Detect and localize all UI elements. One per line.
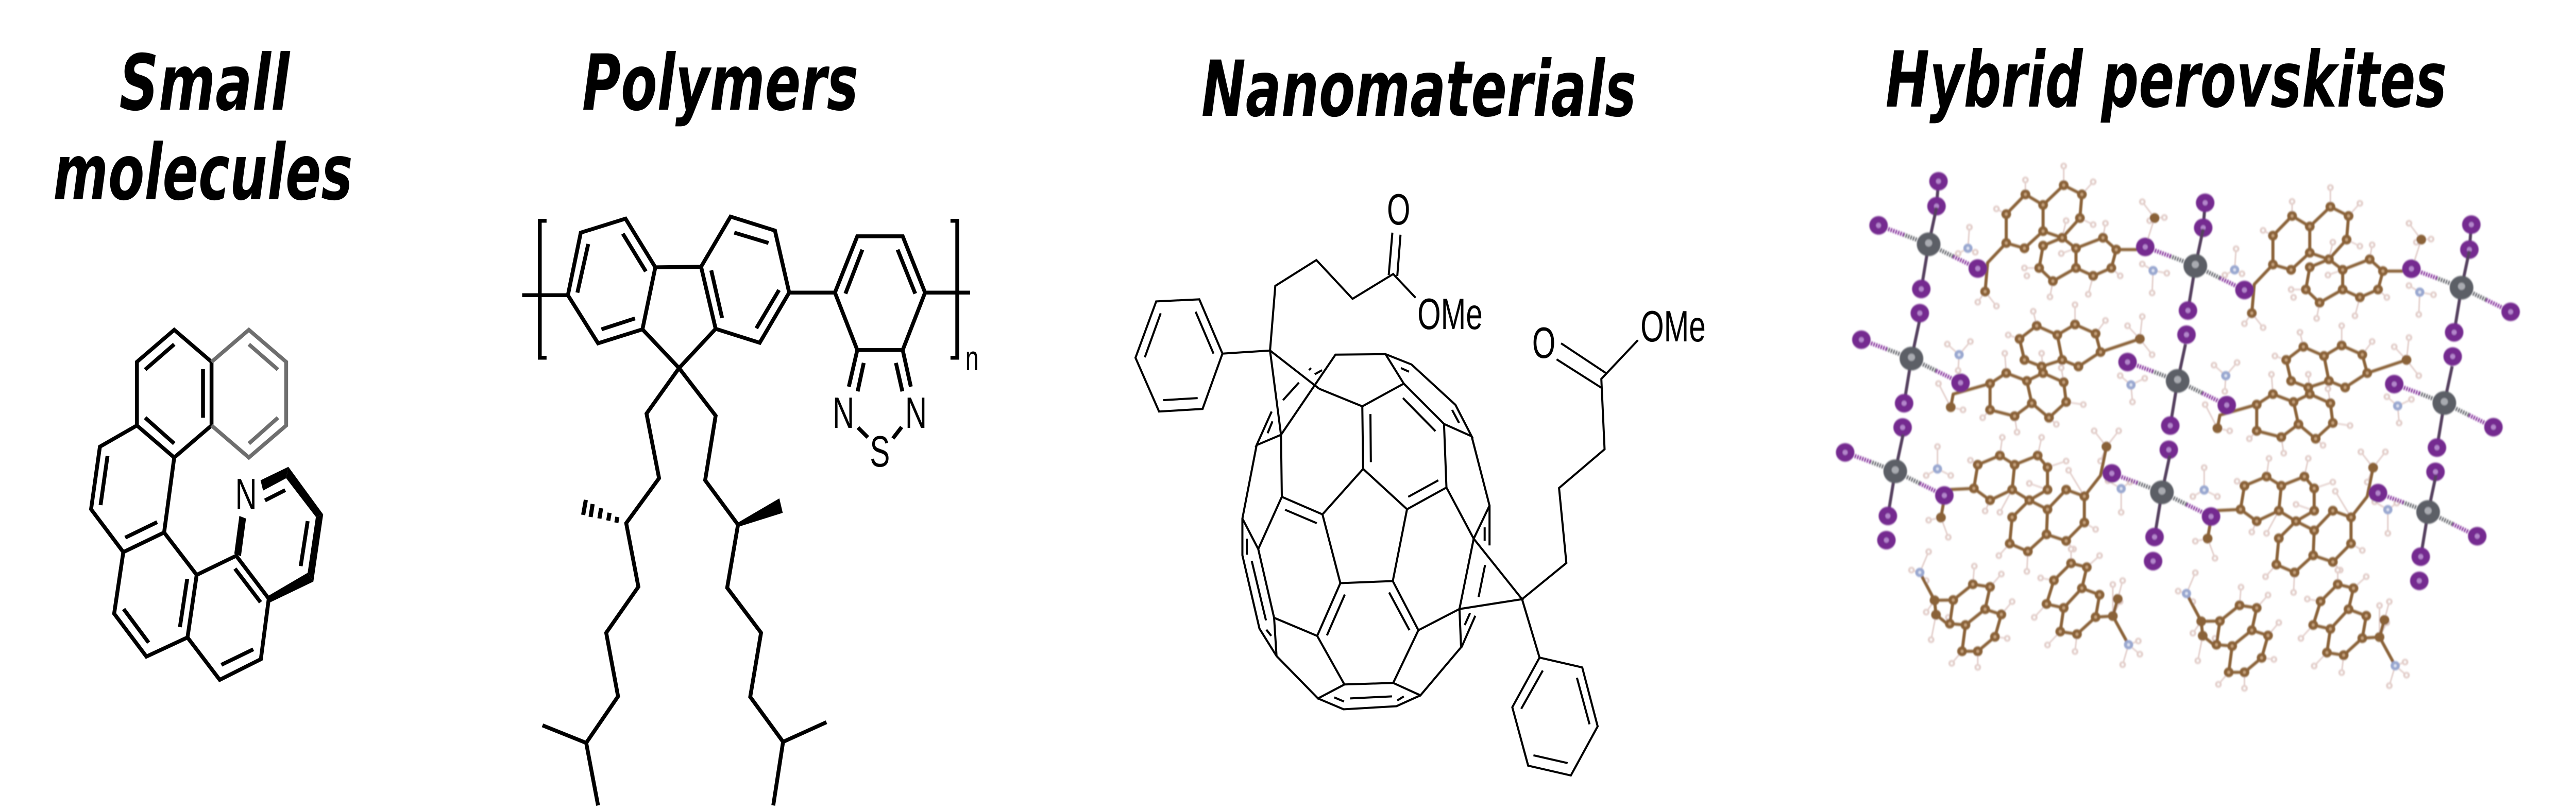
heading: Nanomaterials: Nanomaterials <box>1201 45 1636 134</box>
atom label: N: N <box>235 470 257 519</box>
structure: aza-helicene molecule <box>91 330 323 680</box>
panel: hybrid perovskites <box>1845 36 2511 688</box>
heading: Hybrid perovskites: Hybrid perovskites <box>1886 36 2447 125</box>
structure: fullerene bis-adduct <box>1136 185 1706 775</box>
heading: Small molecules: molecules <box>53 128 353 218</box>
panel: small molecules <box>53 39 353 680</box>
panel: polymers <box>522 39 979 805</box>
subscript: n: n <box>965 339 979 378</box>
atom label: S: S <box>870 427 890 476</box>
heading: Small molecules <box>53 39 353 218</box>
organic layers: naphthalene ammonium cations <box>1911 166 2433 688</box>
atom label: N left: N <box>833 389 854 438</box>
structure: polyfluorene-benzothiadiazole copolymer <box>522 217 979 805</box>
atom label: N right: N <box>905 389 927 438</box>
heading: Polymers: Polymers <box>582 39 858 128</box>
crystal structure: layered perovskite ball and stick model <box>1845 166 2511 688</box>
atom label: OMe: OMe <box>1417 290 1483 339</box>
atom label: O second ester: O <box>1532 319 1555 368</box>
atom label: O: O <box>1387 185 1410 234</box>
atom label: OMe second ester: OMe <box>1640 302 1706 351</box>
inorganic layers: lead iodide octahedra <box>1845 181 2511 581</box>
panel: nanomaterials <box>1136 45 1706 775</box>
heading: Small molecules: Small <box>120 39 291 128</box>
